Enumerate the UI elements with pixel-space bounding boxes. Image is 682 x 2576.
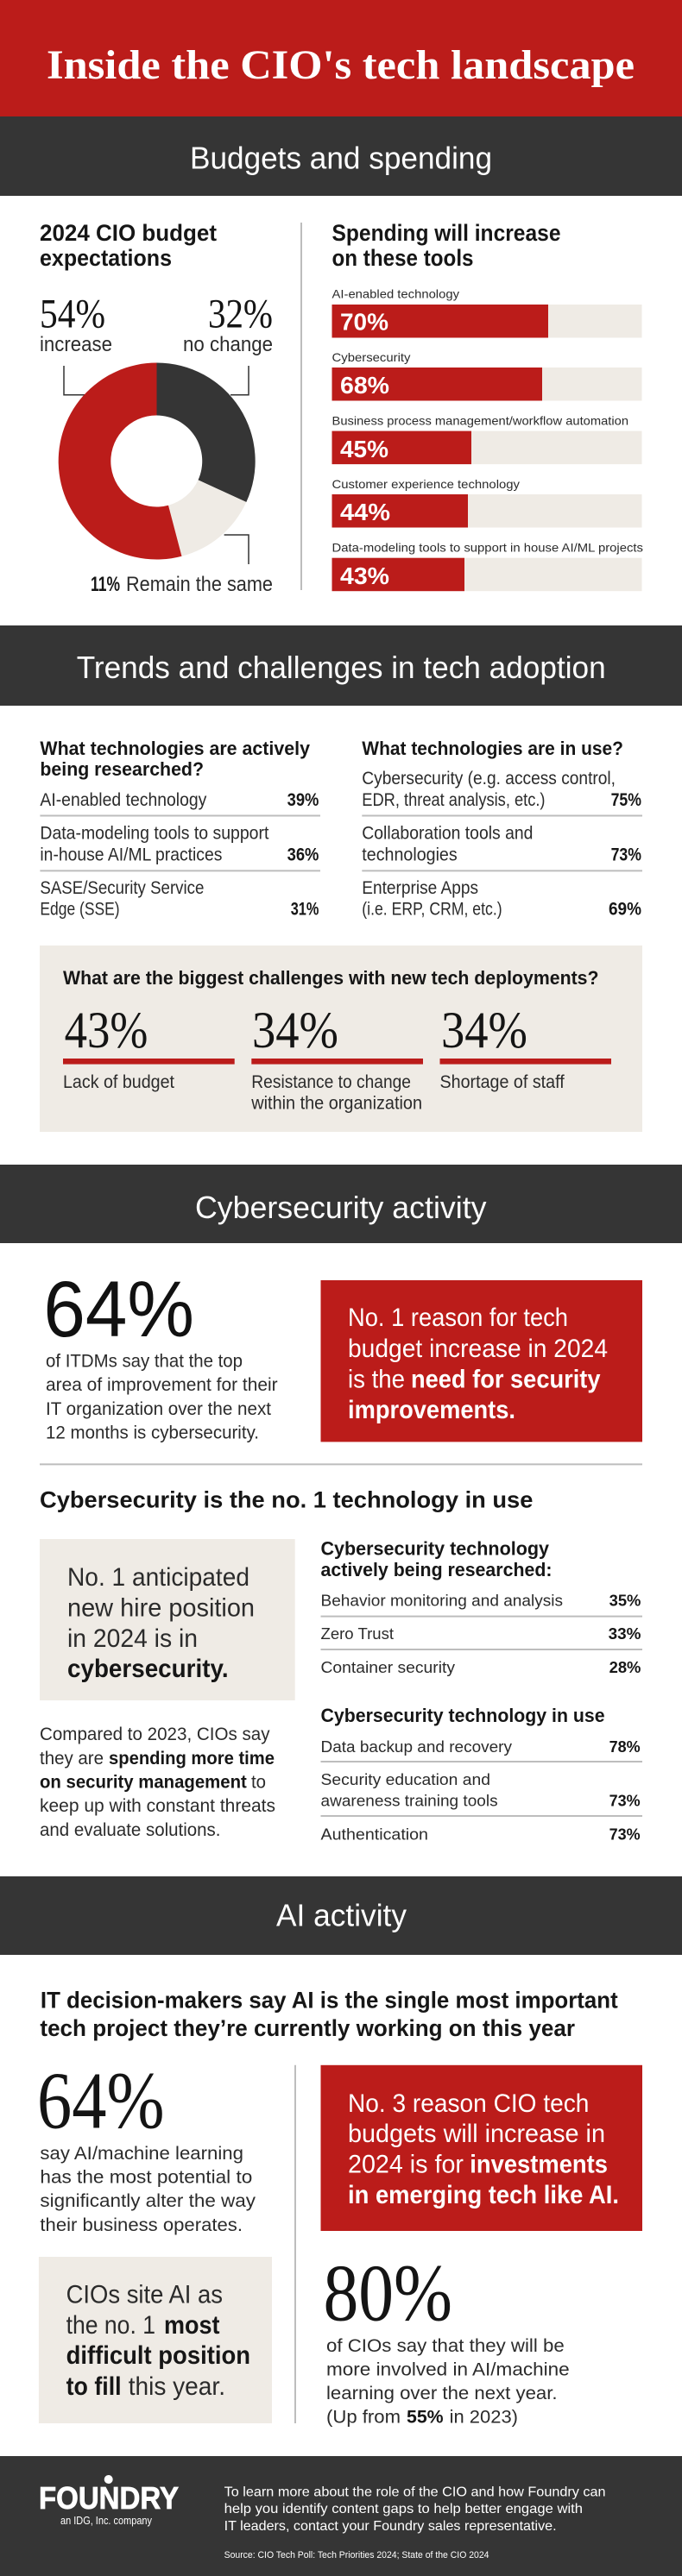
list: technologies actively being researched xyxy=(40,738,320,919)
bar: Customer experience technology 44%: Customer experience technology xyxy=(332,477,520,491)
bar: Business process management 45%: Business process management/workflow automation xyxy=(332,414,628,428)
callout: anticipated new hire: new hire position xyxy=(67,1594,255,1623)
stat: 80% of CIOs: in 2023) xyxy=(450,2407,518,2428)
callout: anticipated new hire: No. 1 anticipated xyxy=(67,1563,249,1592)
logo: Foundry: FOUNDRY xyxy=(39,2480,179,2516)
list: cybersecurity technology researched: Behavior monitoring and analysis xyxy=(321,1592,563,1610)
callout: most difficult position xyxy=(39,2257,272,2423)
callout: no. 3 reason: No. 3 reason CIO tech xyxy=(348,2089,589,2118)
bar: Cybersecurity 68% xyxy=(332,350,642,400)
list: technologies actively being researched: Edge (SSE) xyxy=(40,899,120,919)
list: technologies actively being researched: SASE/Security Service xyxy=(40,878,204,898)
list: technologies in use: Collaboration tools and xyxy=(362,823,533,844)
stat: 80% of CIOs: of CIOs say that they will be xyxy=(326,2336,565,2356)
heading: budget expectations: expectations xyxy=(40,245,172,271)
section header: trends and challenges: Trends and challenges in tech adoption xyxy=(77,650,606,685)
callout: no. 3 reason: 2024 is for xyxy=(348,2151,464,2179)
stat: 64% AI/machine learning: significantly alter the way xyxy=(40,2191,256,2211)
stat: 64% of ITDMs: 64% xyxy=(43,1266,194,1354)
list: technologies actively being researched: in-house AI/ML practices xyxy=(40,845,222,864)
list: technologies in use: Enterprise Apps xyxy=(362,878,478,898)
callout: most difficult position: this year. xyxy=(129,2372,225,2401)
list: cybersecurity technology researched: actively being researched: xyxy=(321,1559,553,1580)
stat: 34% shortage of staff xyxy=(440,1002,611,1092)
stat: 64% of ITDMs: 12 months is cybersecurity. xyxy=(46,1423,259,1443)
text: compared to 2023: on security management xyxy=(40,1772,247,1793)
heading: actively researched: What technologies are actively xyxy=(40,738,311,759)
text: compared to 2023: spending more time xyxy=(109,1749,275,1769)
stat: 64% of ITDMs xyxy=(43,1266,278,1443)
section header: AI activity xyxy=(0,1876,682,1955)
list: technologies in use: 73% xyxy=(611,845,641,864)
stat: 54% increase: 54% xyxy=(40,292,105,336)
panel: spending will increase xyxy=(332,220,643,591)
panel: 2024 CIO budget expectations xyxy=(40,220,273,596)
footer text: help you identify content gaps to help better engage with xyxy=(224,2502,583,2516)
callout: most difficult position: the no. 1 xyxy=(66,2311,155,2340)
stat: 64% AI/machine learning xyxy=(37,2057,256,2235)
section header: budgets and spending xyxy=(0,116,682,196)
callout: most difficult position: difficult position xyxy=(66,2341,250,2370)
footer xyxy=(0,2456,682,2576)
bar: Data-modeling tools 43%: Data-modeling tools to support in house AI/ML projects xyxy=(332,541,643,555)
heading: AI most important project xyxy=(40,1988,618,2041)
list: cybersecurity technology in use: Data backup and recovery xyxy=(321,1737,513,1756)
stat: 64% of ITDMs: area of improvement for their xyxy=(46,1375,278,1395)
stat: 43% lack of budget: 43% xyxy=(65,1002,148,1059)
list: cybersecurity technology in use: Authentication xyxy=(321,1825,428,1844)
callout: no. 3 reason: investments xyxy=(470,2151,608,2179)
list: cybersecurity technology researched: Zero Trust xyxy=(321,1624,394,1643)
list: cybersecurity technology in use: 73% xyxy=(609,1825,641,1844)
connector lines xyxy=(64,366,249,564)
heading: actively researched xyxy=(40,738,311,780)
panel: biggest challenges xyxy=(40,946,642,1132)
text: compared to 2023: to xyxy=(251,1772,266,1793)
bar: Data-modeling tools 43% xyxy=(332,541,643,591)
list: cybersecurity technology researched: 28% xyxy=(609,1658,641,1676)
bar: Business process management 45%: 45% xyxy=(340,436,388,462)
text: compared to 2023: Compared to 2023, CIOs say xyxy=(40,1725,270,1744)
stat: 34% resistance to change xyxy=(250,1002,423,1113)
heading: spending will increase: Spending will increase xyxy=(332,220,561,246)
callout: no. 3 reason: budgets will increase in xyxy=(348,2120,605,2148)
footer text xyxy=(224,2485,606,2534)
heading: spending will increase: on these tools xyxy=(332,245,473,271)
bar: Cybersecurity 68%: Cybersecurity xyxy=(332,350,411,364)
text: compared to 2023: they are xyxy=(40,1749,104,1769)
bar: Data-modeling tools 43%: 43% xyxy=(340,562,389,589)
stat: 43% lack of budget: Lack of budget xyxy=(63,1072,174,1092)
callout: no. 1 reason: need for security xyxy=(411,1365,601,1394)
callout: no. 3 reason: in emerging tech like AI. xyxy=(348,2181,619,2209)
stat: 11% remain the same: 11% xyxy=(91,573,120,596)
list: cybersecurity technology researched: 33% xyxy=(609,1624,641,1643)
section header: cybersecurity activity: Cybersecurity activity xyxy=(195,1190,487,1225)
footer text: To learn more about the role of the CIO and how Foundry can xyxy=(224,2485,606,2499)
bar: AI-enabled technology 70%: AI-enabled technology xyxy=(332,286,459,300)
callout: most difficult position: to fill xyxy=(66,2372,122,2401)
stat: 54% increase: increase xyxy=(40,333,112,356)
list: cybersecurity technology researched xyxy=(321,1538,642,1676)
stat: 34% shortage of staff: Shortage of staff xyxy=(440,1072,565,1092)
list: cybersecurity technology in use: 73% xyxy=(609,1792,641,1810)
panel: biggest challenges: What are the biggest challenges with new tech deployments? xyxy=(63,967,599,989)
heading: budget expectations: 2024 CIO budget xyxy=(40,220,217,246)
callout: anticipated new hire xyxy=(40,1539,295,1700)
stat: 80% of CIOs xyxy=(323,2248,570,2428)
title banner: Inside the CIO's tech landscape xyxy=(47,42,635,88)
list: technologies actively being researched: Data-modeling tools to support xyxy=(40,823,269,844)
callout: no. 1 reason: No. 1 reason for tech xyxy=(348,1304,568,1332)
stat: 11% remain the same: Remain the same xyxy=(126,573,273,596)
stat: 34% resistance to change: 34% xyxy=(252,1002,338,1059)
list: cybersecurity technology in use: awareness training tools xyxy=(321,1792,498,1810)
section header: trends and challenges xyxy=(0,625,682,706)
stat: 64% AI/machine learning: has the most potential to xyxy=(40,2168,252,2188)
heading: spending will increase xyxy=(332,220,561,271)
stat: 32% no change xyxy=(183,292,273,356)
stat: 64% AI/machine learning: say AI/machine learning xyxy=(40,2144,243,2164)
callout: no. 1 reason: is the xyxy=(348,1365,405,1394)
list: technologies in use: 69% xyxy=(609,899,641,919)
list: cybersecurity technology researched: Cybersecurity technology xyxy=(321,1538,550,1560)
stat: 34% resistance to change: within the organization xyxy=(250,1093,422,1113)
stat: 43% lack of budget xyxy=(63,1002,235,1092)
callout: no. 3 reason xyxy=(321,2065,642,2231)
list: technologies in use: Cybersecurity (e.g. access control, xyxy=(362,769,616,789)
list: cybersecurity technology researched: Container security xyxy=(321,1658,456,1676)
stat: 64% AI/machine learning: 64% xyxy=(37,2057,164,2146)
section header: AI activity: AI activity xyxy=(276,1897,407,1932)
list: technologies in use: 75% xyxy=(611,790,641,810)
title banner xyxy=(0,0,682,116)
bar: Cybersecurity 68%: 68% xyxy=(340,372,389,399)
callout: no. 1 reason: improvements. xyxy=(348,1396,515,1424)
list: technologies in use: What technologies are in use? xyxy=(362,738,623,759)
list: technologies actively being researched: 31% xyxy=(291,899,319,919)
text: compared to 2023: and evaluate solutions. xyxy=(40,1820,221,1840)
list: cybersecurity technology researched: 35% xyxy=(609,1592,641,1610)
heading: AI most important project: IT decision-makers say AI is the single most important xyxy=(41,1988,618,2014)
callout: most difficult position: most xyxy=(164,2311,219,2340)
bar: Customer experience technology 44%: 44% xyxy=(340,499,390,525)
heading: AI most important project: tech project they’re currently working on this year xyxy=(40,2015,575,2041)
list: technologies in use: technologies xyxy=(362,845,458,864)
text: compared to 2023 xyxy=(40,1725,275,1840)
stat: 80% of CIOs: (Up from xyxy=(326,2407,401,2428)
bar: Customer experience technology 44% xyxy=(332,477,642,528)
list: technologies in use: EDR, threat analysis, etc.) xyxy=(362,790,546,810)
list: cybersecurity technology in use xyxy=(321,1705,642,1844)
bar: AI-enabled technology 70% xyxy=(332,286,642,338)
stat: 54% increase xyxy=(40,292,112,356)
stat: 64% of ITDMs: IT organization over the next xyxy=(46,1399,271,1419)
bar: AI-enabled technology 70%: 70% xyxy=(340,309,388,336)
logo: Foundry: an IDG, Inc. company xyxy=(60,2515,153,2527)
heading: cybersecurity no. 1: Cybersecurity is the no. 1 technology in use xyxy=(40,1486,533,1512)
list: technologies in use: (i.e. ERP, CRM, etc.) xyxy=(362,899,502,919)
list: technologies actively being researched: AI-enabled technology xyxy=(40,790,207,810)
stat: 32% no change: 32% xyxy=(208,292,273,336)
stat: 34% shortage of staff: 34% xyxy=(441,1002,527,1059)
stat: 80% of CIOs: more involved in AI/machine xyxy=(326,2359,570,2379)
heading: budget expectations xyxy=(40,220,217,271)
section header: budgets and spending: Budgets and spending xyxy=(190,140,492,176)
stat: 32% no change: no change xyxy=(183,333,273,356)
callout: no. 1 reason: budget increase in 2024 xyxy=(348,1335,608,1363)
logo: Foundry xyxy=(39,2475,179,2527)
callout: most difficult position: CIOs site AI as xyxy=(66,2281,223,2309)
stat: 64% AI/machine learning: their business operates. xyxy=(40,2215,243,2235)
callout: anticipated new hire: in 2024 is in xyxy=(67,1624,198,1653)
stat: 64% of ITDMs: of ITDMs say that the top xyxy=(46,1352,243,1372)
text: compared to 2023: keep up with constant threats xyxy=(40,1796,275,1816)
list: technologies in use xyxy=(362,738,642,919)
section header: cybersecurity activity xyxy=(0,1165,682,1243)
footer text: IT leaders, contact your Foundry sales representative. xyxy=(224,2519,557,2534)
list: technologies actively being researched: 36% xyxy=(287,845,319,864)
callout: no. 1 reason xyxy=(321,1280,642,1442)
stat: 34% resistance to change: Resistance to change xyxy=(251,1072,411,1092)
list: cybersecurity technology in use: Security education and xyxy=(321,1770,490,1788)
source line: Source: CIO Tech Poll: Tech Priorities 2024; State of the CIO 2024 xyxy=(224,2550,489,2560)
heading: actively researched: being researched? xyxy=(40,758,204,780)
stat: 80% of CIOs: 80% xyxy=(323,2248,452,2338)
list: cybersecurity technology in use: Cybersecurity technology in use xyxy=(321,1705,605,1726)
bar: Business process management 45% xyxy=(332,414,642,464)
list: technologies actively being researched: 39% xyxy=(287,790,319,810)
donut chart xyxy=(59,362,256,559)
stat: 80% of CIOs: learning over the next year. xyxy=(326,2384,558,2403)
stat: 80% of CIOs: 55% xyxy=(407,2407,444,2428)
list: cybersecurity technology in use: 78% xyxy=(609,1737,641,1756)
callout: anticipated new hire: cybersecurity. xyxy=(67,1655,229,1683)
